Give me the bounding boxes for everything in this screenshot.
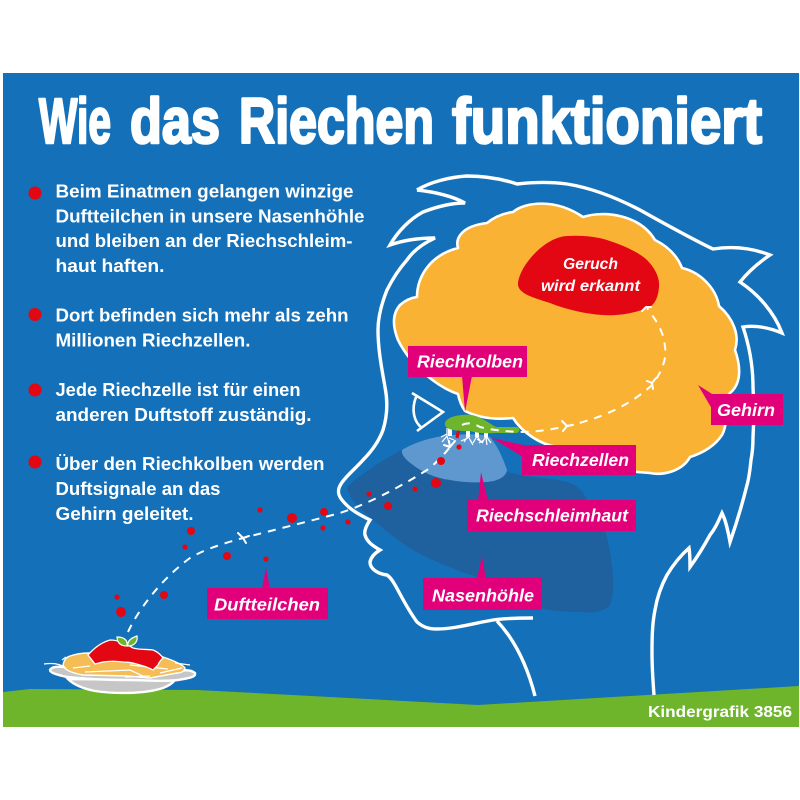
bullet 3: anderen Duftstoff zuständig. <box>56 404 312 425</box>
label: Riechkolben: Riechkolben <box>417 352 523 372</box>
arrow markers on signal path <box>562 307 656 431</box>
bullet 1: und bleiben an der Riechschleim- <box>56 230 352 251</box>
basil leaves <box>117 636 137 646</box>
bullet 4 <box>28 453 324 524</box>
arrow markers on scent path <box>238 441 455 543</box>
eye <box>412 393 443 431</box>
plate bowl <box>68 679 175 693</box>
brain <box>394 204 739 474</box>
label: Riechschleimhaut <box>467 472 636 531</box>
label: Gehirn: Gehirn <box>717 400 775 420</box>
bullet 3: Jede Riechzelle ist für einen <box>56 379 300 400</box>
title: Wie <box>39 85 111 157</box>
title: funktioniert <box>452 85 762 157</box>
spaghetti strands <box>44 657 190 677</box>
red area: smell recognised: wird erkannt <box>541 278 641 295</box>
nasal cavity <box>347 450 613 613</box>
title: Riechen <box>239 85 434 157</box>
bullet 1: haut haften. <box>56 255 164 276</box>
bullet 2 <box>28 304 348 350</box>
bullet 2: Millionen Riechzellen. <box>56 330 250 350</box>
label: Riechzellen <box>492 438 636 475</box>
olfactory mucosa <box>402 434 507 482</box>
dashed path: signal to the brain <box>462 308 665 432</box>
red area: smell recognised: Geruch <box>563 256 618 273</box>
head outline <box>338 176 782 696</box>
bullet 3 <box>28 379 312 425</box>
icon: plate of spaghetti <box>44 636 195 693</box>
bullet 1 <box>28 180 364 276</box>
bullet 2: Dort befinden sich mehr als zehn <box>56 304 348 326</box>
tomato sauce <box>88 640 163 670</box>
bullet 1: Duftteilchen in unsere Nasenhöhle <box>56 206 364 226</box>
text block: explanation bullets <box>28 180 364 524</box>
label: Gehirn <box>698 385 783 425</box>
label: Duftteilchen <box>207 567 328 619</box>
label: Nasenhöhle: Nasenhöhle <box>432 586 534 606</box>
title <box>39 85 762 157</box>
bullet 4: Über den Riechkolben werden <box>56 453 324 474</box>
red area: smell recognised <box>518 236 659 315</box>
green ground <box>3 686 799 727</box>
spaghetti <box>63 653 185 678</box>
title: das <box>130 85 220 157</box>
bullet 4: Duftsignale an das <box>56 478 220 499</box>
bullet 1: Beim Einatmen gelangen winzige <box>56 180 354 202</box>
label: Riechkolben <box>408 346 527 412</box>
credit: Kindergrafik 3856 <box>648 704 792 721</box>
head contour with hair, forehead, nose and chin <box>417 176 782 695</box>
olfactory cells <box>441 428 491 445</box>
olfactory bulb <box>445 415 520 433</box>
label: Riechschleimhaut: Riechschleimhaut <box>476 506 629 526</box>
label: Riechzellen: Riechzellen <box>532 450 629 470</box>
plate rim <box>50 667 195 681</box>
dashed path: scent particles to the nose <box>128 447 450 632</box>
label: Duftteilchen: Duftteilchen <box>214 594 320 614</box>
scent particles <box>114 444 462 617</box>
bullet 4: Gehirn geleitet. <box>56 503 194 524</box>
label: Nasenhöhle <box>423 556 541 610</box>
